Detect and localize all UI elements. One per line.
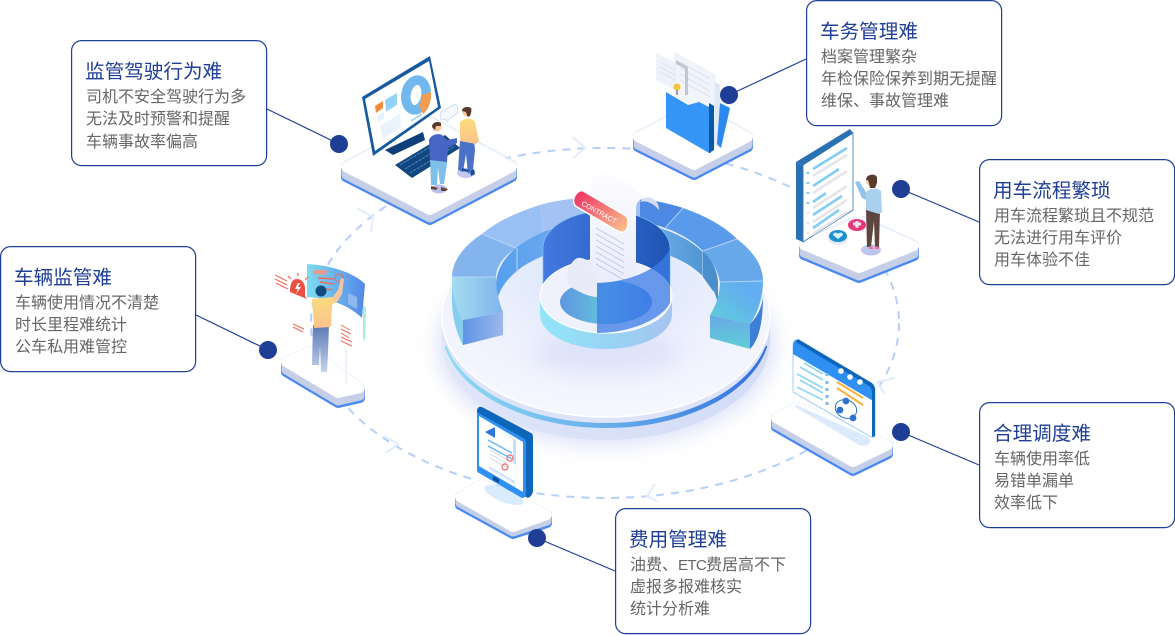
icon: alert and notes	[275, 273, 352, 385]
connector: 车务管理难	[720, 59, 806, 104]
card: 费用管理难: 油费、ETC费居高不下	[630, 556, 786, 574]
inner wall	[496, 220, 718, 309]
card: 车辆监管难: 公车私用难管控	[15, 338, 127, 356]
paper roll	[567, 258, 597, 297]
card: 车务管理难: 档案管理繁杂	[821, 48, 917, 66]
platform: booking process	[796, 129, 916, 278]
outer walls	[452, 277, 463, 345]
paper scroll	[590, 173, 659, 283]
connector: 车辆监管难	[196, 315, 277, 359]
card: 车辆监管难	[1, 247, 196, 372]
card: 合理调度难: 车辆使用率低	[994, 450, 1090, 468]
icon: monitor with chart	[362, 56, 441, 156]
card: 费用管理难: 统计分析难	[630, 600, 710, 618]
icon: curved screen	[307, 264, 366, 342]
card: 用车流程繁琐: 用车流程繁琐	[993, 180, 1111, 202]
platform: driving behaviour	[344, 56, 516, 220]
card: 费用管理难: 虚报多报难核实	[630, 578, 742, 596]
platform: vehicle monitoring	[275, 264, 366, 403]
card: 用车流程繁琐: 用车流程繁琐且不规范	[994, 207, 1154, 225]
card: 监管驾驶行为难: 司机不安全驾驶行为多	[86, 88, 246, 106]
icon: tablet with invoice	[477, 407, 533, 498]
card: 合理调度难: 合理调度难	[993, 423, 1091, 445]
card: 车务管理难: 年检保险保养到期无提醒	[821, 70, 997, 88]
card: 车务管理难: 车务管理难	[820, 21, 918, 43]
dashed orbit ring	[311, 137, 899, 501]
card: 用车流程繁琐: 无法进行用车评价	[994, 229, 1122, 247]
card: 合理调度难: 易错单漏单	[994, 472, 1074, 490]
central contract cylinder	[540, 173, 672, 349]
connector: 用车流程繁琐	[892, 180, 979, 222]
icon: app window	[793, 339, 875, 437]
card: 费用管理难: 费用管理难	[629, 529, 727, 551]
card: 车辆监管难: 车辆使用情况不清楚	[15, 294, 159, 312]
icon: form panel	[796, 129, 853, 242]
central contract cylinder: CONTRACT	[580, 201, 618, 226]
platform: expense	[460, 407, 547, 534]
icon: keyboard	[395, 135, 460, 178]
platform: folder	[636, 53, 750, 175]
icon: man at screen	[312, 278, 344, 372]
platform: dispatch	[776, 339, 888, 471]
card: 车务管理难: 维保、事故管理难	[821, 92, 949, 110]
card: 用车流程繁琐: 用车体验不佳	[994, 251, 1090, 269]
card: 合理调度难	[980, 403, 1175, 528]
card: 监管驾驶行为难	[72, 41, 267, 166]
central platform	[438, 217, 774, 445]
card: 车务管理难	[807, 1, 1002, 126]
connector: 合理调度难	[892, 423, 979, 465]
card: 监管驾驶行为难: 车辆事故率偏高	[86, 133, 198, 151]
card: 费用管理难	[616, 509, 811, 634]
card: 监管驾驶行为难: 无法及时预警和提醒	[86, 110, 230, 128]
connector: 费用管理难	[528, 529, 615, 571]
segment tops	[452, 234, 516, 277]
icon: two people	[429, 104, 479, 194]
card: 车辆监管难: 车辆监管难	[14, 267, 112, 289]
icon: folder with documents	[656, 53, 730, 153]
icon: man and buttons	[828, 175, 882, 256]
card: 监管驾驶行为难: 监管驾驶行为难	[85, 61, 222, 83]
card: 用车流程繁琐	[980, 160, 1175, 285]
card: 车辆监管难: 时长里程难统计	[15, 316, 127, 334]
card: 合理调度难: 效率低下	[994, 494, 1058, 512]
blue segmented ring	[452, 197, 763, 349]
connector: 监管驾驶行为难	[267, 109, 348, 153]
